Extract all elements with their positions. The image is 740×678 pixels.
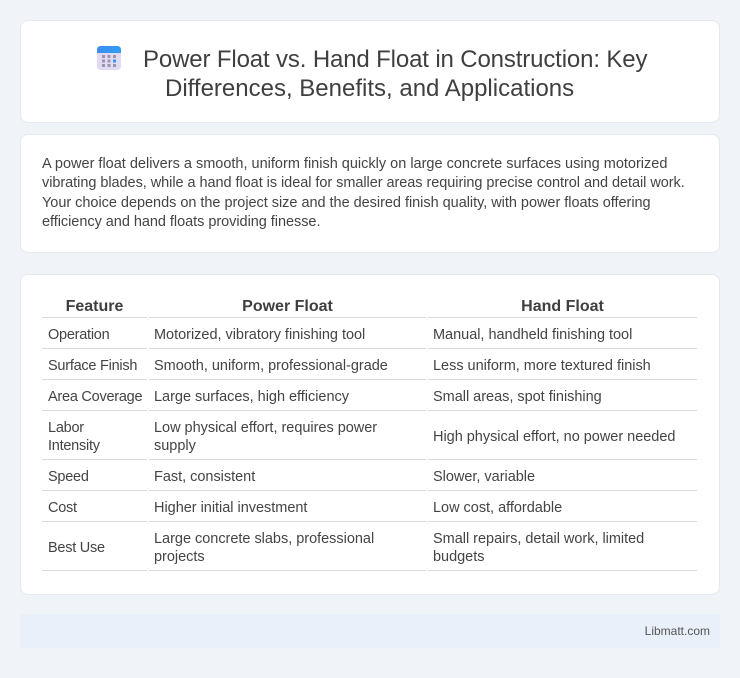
table: feature comparison: Speed — [48, 468, 89, 484]
table: feature comparison: Slower, variable — [433, 468, 535, 484]
table: feature comparison: Higher initial investment — [154, 500, 307, 516]
table: feature comparison: Hand Float — [521, 298, 604, 315]
table: feature comparison: Large concrete slabs, professional — [154, 530, 374, 546]
table: feature comparison: Labor — [48, 420, 84, 436]
text block: summary: vibrating blades, while a hand float is ideal for smaller areas requiring precise control and detail work. — [42, 175, 685, 191]
panel: intro text — [20, 134, 720, 253]
heading: Power Float vs. Hand Float in Construction: Key — [143, 46, 647, 73]
panel: comparison table — [20, 274, 720, 595]
table: feature comparison: Feature — [66, 298, 123, 315]
text block: summary: efficiency and hand floats providing finesse. — [42, 214, 320, 230]
table: feature comparison: Low physical effort, requires power — [154, 420, 377, 436]
table: feature comparison: Intensity — [48, 438, 100, 454]
table: feature comparison: supply — [154, 438, 196, 454]
footer — [20, 614, 720, 648]
icon: calendar — [97, 46, 121, 70]
table: feature comparison: Power Float — [242, 298, 333, 315]
text: site credit: Libmatt.com — [645, 624, 710, 638]
table: feature comparison: Cost — [48, 500, 77, 516]
table: feature comparison: Area Coverage — [48, 388, 142, 404]
table: feature comparison — [42, 298, 697, 571]
table: feature comparison: High physical effort, no power needed — [433, 428, 675, 444]
table: feature comparison: Surface Finish — [48, 358, 137, 374]
text block: summary — [42, 156, 685, 230]
table: feature comparison: Less uniform, more textured finish — [433, 358, 651, 374]
table: feature comparison: Best Use — [48, 540, 105, 556]
table: feature comparison: Operation — [48, 326, 109, 342]
heading: Differences, Benefits, and Applications — [165, 75, 574, 102]
panel: title — [20, 20, 720, 123]
table: feature comparison: Manual, handheld finishing tool — [433, 326, 632, 342]
heading — [143, 46, 648, 102]
table: feature comparison: Smooth, uniform, professional-grade — [154, 358, 388, 374]
table: feature comparison: Large surfaces, high efficiency — [154, 388, 349, 404]
table: feature comparison: budgets — [433, 548, 484, 564]
table: feature comparison: Small repairs, detail work, limited — [433, 530, 644, 546]
table: feature comparison: Small areas, spot finishing — [433, 388, 602, 404]
text block: summary: A power float delivers a smooth, uniform finish quickly on large concrete surfaces using motorized — [42, 156, 667, 172]
table: feature comparison: Low cost, affordable — [433, 500, 562, 516]
table: feature comparison: Motorized, vibratory finishing tool — [154, 326, 365, 342]
table: feature comparison: Fast, consistent — [154, 468, 255, 484]
text block: summary: Your choice depends on the project size and the desired finish quality, with power floats offering — [42, 195, 651, 211]
table: feature comparison: projects — [154, 548, 205, 564]
